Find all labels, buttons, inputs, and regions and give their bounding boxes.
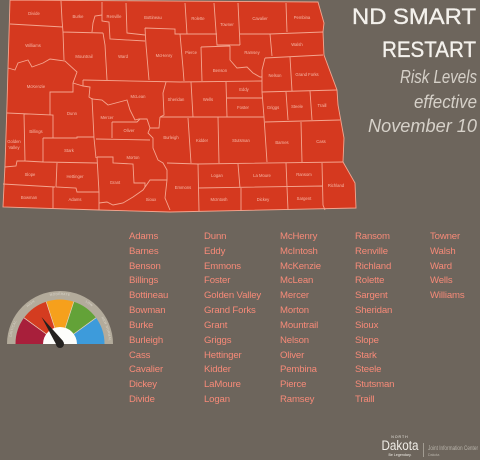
county labels: Rolette — [191, 16, 205, 21]
county list column 3: Pierce — [280, 379, 306, 390]
county labels: Logan — [211, 173, 223, 178]
gauge ring labels: CRITICAL — [10, 321, 16, 337]
county labels: McLean — [131, 94, 146, 99]
county list column 1: Barnes — [129, 246, 159, 257]
county labels: Grand Forks — [295, 72, 319, 77]
county labels: Ransom — [296, 172, 312, 177]
county list column 3: McIntosh — [280, 246, 318, 257]
county list column 3: McLean — [280, 275, 313, 286]
county labels: Billings — [29, 129, 43, 134]
county labels: Barnes — [275, 140, 289, 145]
subtitle: risk levels effective date: effective — [414, 92, 477, 112]
county list column 2: Eddy — [204, 246, 226, 257]
county labels: Valley — [8, 145, 20, 150]
county labels: Bowman — [21, 195, 38, 200]
county list column 3: Pembina — [280, 364, 318, 375]
gauge ring labels: MODERATE — [50, 292, 70, 296]
county list column 1: Benson — [129, 261, 161, 272]
county list column 1: Bowman — [129, 305, 165, 316]
county labels: Cavalier — [252, 16, 268, 21]
county labels: Burke — [73, 14, 84, 19]
county list column 3: Mountrail — [280, 320, 318, 331]
county list column 4: Slope — [355, 335, 379, 346]
county labels: McHenry — [156, 53, 173, 58]
subtitle: risk levels effective date: November 10 — [368, 116, 477, 136]
county list column 2: Foster — [204, 275, 231, 286]
county list column 2: Kidder — [204, 364, 232, 375]
county list column 2: Dunn — [204, 231, 226, 242]
logo: North Dakota Joint Information Center: NORTH — [391, 435, 409, 439]
county labels: Nelson — [268, 73, 282, 78]
logo: North Dakota Joint Information Center: Dakota — [428, 453, 439, 457]
gauge ring labels: LOW — [86, 300, 93, 306]
county list column 5: Towner — [430, 231, 461, 242]
logo: North Dakota Joint Information Center: Dakota — [382, 438, 419, 453]
county list column 3 — [280, 231, 321, 405]
county labels: Stutsman — [232, 138, 251, 143]
title: ND SMART — [352, 4, 476, 29]
county list column 4: Sioux — [355, 320, 379, 331]
county labels: McKenzie — [27, 84, 46, 89]
county list column 2: Logan — [204, 394, 230, 405]
county list column 4: Stark — [355, 350, 377, 361]
county list column 4: Steele — [355, 364, 381, 375]
county labels: Emmons — [175, 185, 191, 190]
county list column 1: Cavalier — [129, 364, 164, 375]
map: North Dakota counties — [3, 0, 356, 212]
county labels: La Moure — [253, 173, 272, 178]
county labels: Adams — [68, 197, 82, 202]
county list column 4: Traill — [355, 394, 375, 405]
county labels: Grant — [110, 180, 121, 185]
county list column 1 — [129, 231, 168, 405]
county labels: Towner — [220, 22, 234, 27]
logo: North Dakota Joint Information Center — [382, 435, 478, 457]
county list column 4: Stutsman — [355, 379, 394, 390]
title — [352, 4, 476, 62]
county list column 4 — [355, 231, 394, 405]
county list column 4: Renville — [355, 246, 388, 257]
county labels: Mountrail — [75, 54, 93, 59]
county labels: Traill — [318, 103, 327, 108]
county list column 2: Golden Valley — [204, 290, 261, 301]
county list column 3: McKenzie — [280, 261, 321, 272]
county list column 2: Grand Forks — [204, 305, 256, 316]
county labels: Ramsey — [244, 50, 261, 55]
county labels: Eddy — [239, 87, 250, 92]
county list column 1: Divide — [129, 394, 155, 405]
county labels — [7, 11, 345, 202]
gauge ring labels: NEW NORMAL — [102, 316, 111, 340]
county labels: Sheridan — [168, 97, 185, 102]
county labels: Walsh — [291, 42, 303, 47]
county labels: Sioux — [146, 197, 157, 202]
county labels: Sargent — [297, 196, 312, 201]
county labels: Cass — [316, 139, 326, 144]
county labels: Bottineau — [144, 15, 163, 20]
county labels: Steele — [291, 104, 304, 109]
county labels: Burleigh — [163, 135, 179, 140]
county list column 2: Emmons — [204, 261, 241, 272]
county list column 3: Mercer — [280, 290, 310, 301]
county list column 5: Wells — [430, 275, 453, 286]
county list column 3: Oliver — [280, 350, 305, 361]
county labels: Hettinger — [66, 174, 84, 179]
gauge needle — [42, 317, 64, 348]
county labels: McIntosh — [210, 197, 228, 202]
county list column 2: Grant — [204, 320, 228, 331]
county labels: Foster — [237, 105, 250, 110]
county list column 3: McHenry — [280, 231, 318, 242]
county labels: Dickey — [257, 197, 270, 202]
county list column 5: Williams — [430, 290, 465, 301]
county labels: Dunn — [67, 111, 78, 116]
gauge ring labels: HIGH — [26, 300, 34, 307]
county list column 4: Sheridan — [355, 305, 392, 316]
county list column 4: Rolette — [355, 275, 384, 286]
county labels: Wells — [203, 97, 213, 102]
county list column 4: Richland — [355, 261, 391, 272]
county list column 1: Dickey — [129, 379, 157, 390]
county list column 1: Cass — [129, 350, 151, 361]
subtitle: risk levels effective date — [368, 67, 477, 136]
county labels: Stark — [64, 148, 75, 153]
gauge ring labels — [10, 292, 111, 340]
county labels: Ward — [118, 54, 129, 59]
county labels: Divide — [28, 11, 40, 16]
county labels: Kidder — [196, 138, 209, 143]
county labels: Pierce — [185, 50, 198, 55]
county labels: Richland — [328, 183, 345, 188]
county list column 3: Ramsey — [280, 394, 315, 405]
county list column 5 — [430, 231, 465, 301]
county labels: Griggs — [267, 105, 279, 110]
county list column 4: Ransom — [355, 231, 390, 242]
county labels: Slope — [25, 172, 36, 177]
county labels: Williams — [25, 43, 41, 48]
county list column 1: Bottineau — [129, 290, 168, 301]
county labels: Benson — [213, 68, 228, 73]
county labels: Pembina — [294, 15, 311, 20]
county list column 1: Burleigh — [129, 335, 163, 346]
county list column 4: Sargent — [355, 290, 388, 301]
risk gauge — [7, 291, 113, 348]
county list column 2: Hettinger — [204, 350, 243, 361]
county list column 2 — [204, 231, 261, 405]
county list column 5: Walsh — [430, 246, 456, 257]
county labels: Morton — [126, 155, 140, 160]
county labels: Renville — [107, 14, 122, 19]
county labels: Golden — [7, 139, 21, 144]
county list column 2: Griggs — [204, 335, 232, 346]
county list column 3: Morton — [280, 305, 309, 316]
county list column 2: LaMoure — [204, 379, 241, 390]
county labels: Mercer — [100, 115, 114, 120]
logo: North Dakota Joint Information Center: Be Legendary. — [388, 453, 412, 457]
county list column 5: Ward — [430, 261, 452, 272]
county labels: Oliver — [124, 128, 135, 133]
county list column 1: Burke — [129, 320, 153, 331]
county list column 1: Billings — [129, 275, 159, 286]
county list column 1: Adams — [129, 231, 158, 242]
county list column 3: Nelson — [280, 335, 309, 346]
